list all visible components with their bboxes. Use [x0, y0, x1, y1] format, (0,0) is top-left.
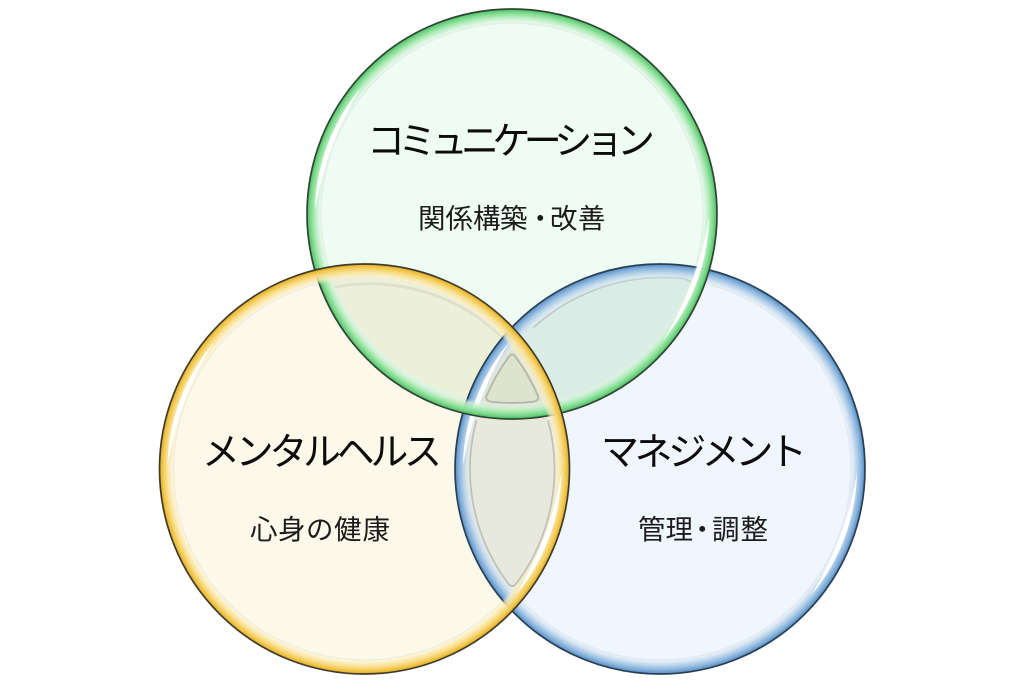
circle rim: communication [307, 9, 717, 419]
circle rim: mental health [160, 264, 570, 674]
region fills [160, 9, 865, 674]
title: communication: コミュニケーション [367, 121, 655, 163]
overlap inner outlines [335, 278, 695, 586]
circle rim: management [455, 264, 865, 674]
subtitle: relationships: 関係構築・改善 [418, 203, 606, 234]
title: mental health: メンタルヘルス [202, 432, 442, 474]
subtitle: mind and body: 心身の健康 [250, 514, 390, 545]
title: management: マネジメント [601, 432, 807, 474]
faint inner rims [174, 23, 851, 660]
subtitle: management and adjustment: 管理・調整 [638, 514, 768, 545]
venn diagram [158, 8, 866, 675]
